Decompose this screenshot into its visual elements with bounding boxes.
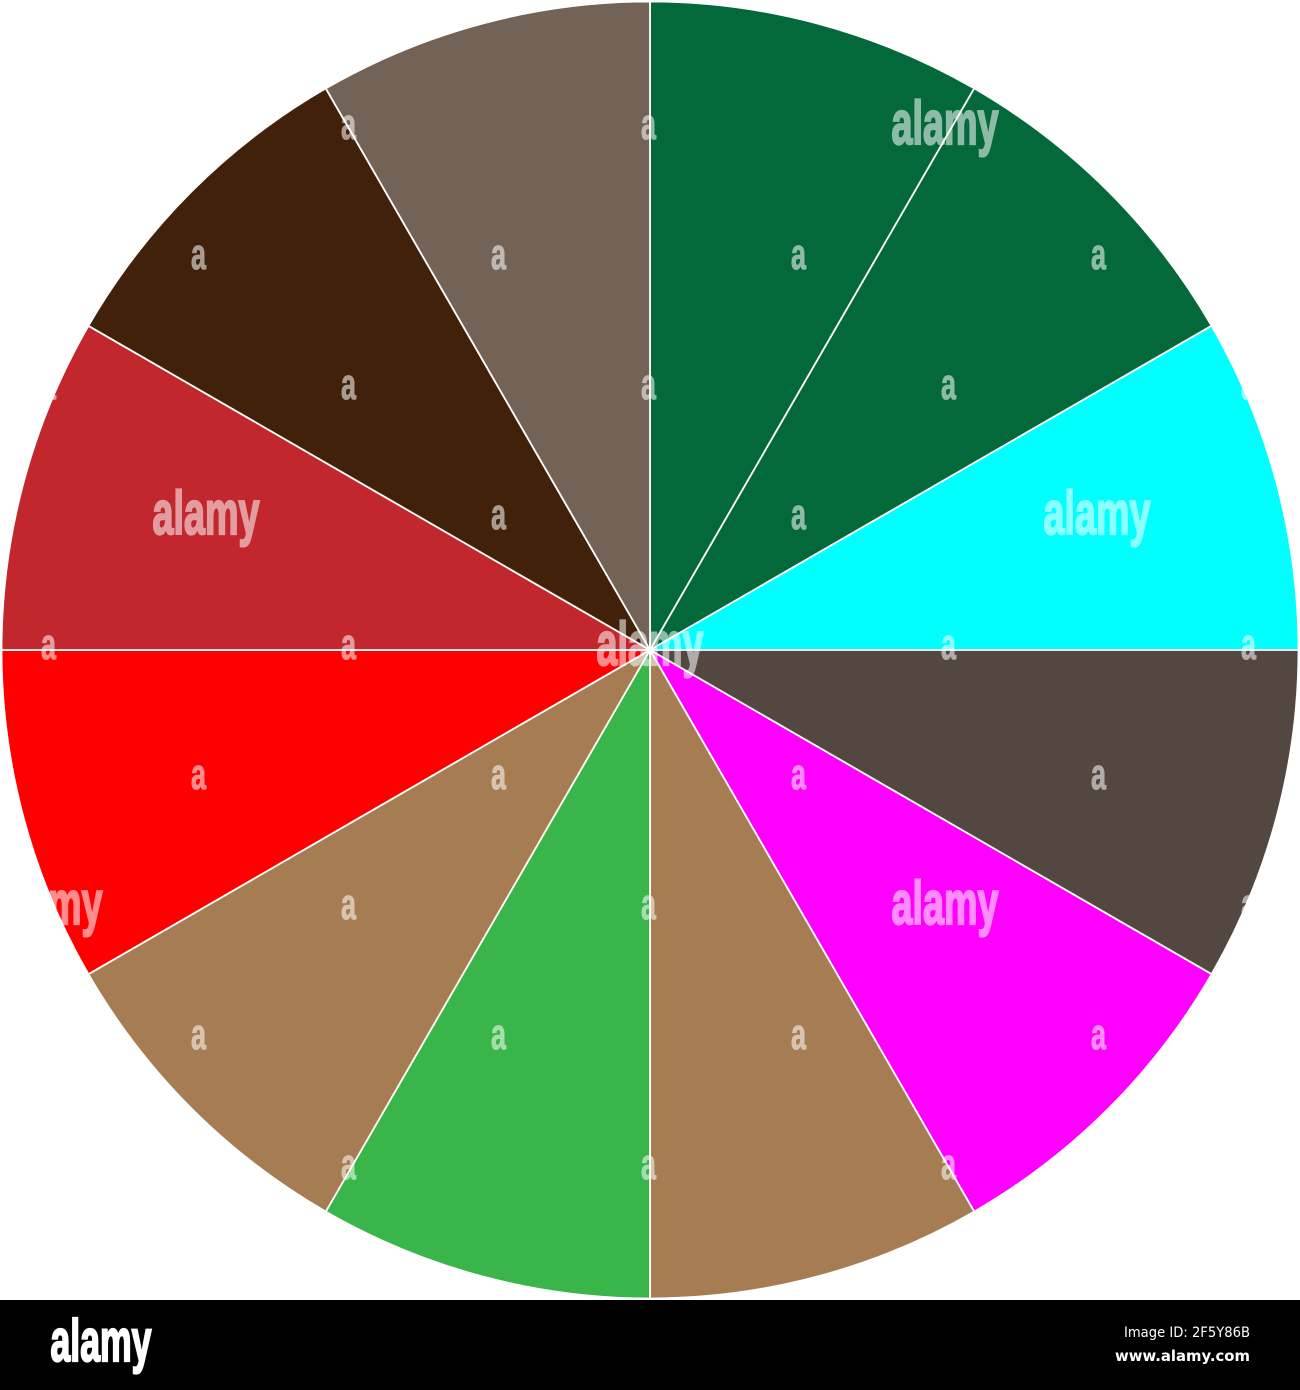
watermark: small repeated a marks: a bbox=[341, 620, 356, 669]
watermark: large alamy marks: alamy bbox=[1044, 479, 1151, 547]
footer logo: alamy: alamy bbox=[50, 1308, 152, 1374]
watermark: small repeated a marks: a bbox=[1241, 360, 1256, 409]
watermark: small repeated a marks: a bbox=[791, 750, 806, 799]
watermark: small repeated a marks: a bbox=[941, 1140, 956, 1189]
watermark: large alamy marks bbox=[0, 89, 1151, 937]
watermark: small repeated a marks: a bbox=[1091, 750, 1106, 799]
segment: red bbox=[2, 650, 650, 974]
watermark: small repeated a marks: a bbox=[1241, 620, 1256, 669]
watermark: small repeated a marks: a bbox=[641, 880, 656, 929]
segment: taupe bbox=[326, 2, 650, 650]
segment: dark green 2 bbox=[650, 88, 1212, 650]
segment: tan left bbox=[88, 650, 650, 1212]
watermark: small repeated a marks: a bbox=[341, 1140, 356, 1189]
watermark: small repeated a marks: a bbox=[341, 100, 356, 149]
watermark: small repeated a marks bbox=[41, 100, 1256, 1189]
watermark: small repeated a marks: a bbox=[1091, 1010, 1106, 1059]
watermark: large alamy marks: alamy bbox=[0, 869, 103, 937]
watermark: small repeated a marks: a bbox=[191, 750, 206, 799]
watermark: small repeated a marks: a bbox=[941, 360, 956, 409]
watermark: large alamy marks: alamy bbox=[892, 869, 999, 937]
footer background bbox=[0, 1300, 1300, 1390]
watermark: small repeated a marks: a bbox=[41, 360, 56, 409]
segment: green bbox=[326, 650, 650, 1298]
watermark: small repeated a marks: a bbox=[641, 100, 656, 149]
watermark: small repeated a marks: a bbox=[491, 490, 506, 539]
footer bar bbox=[0, 1300, 1300, 1390]
watermark: small repeated a marks: a bbox=[341, 880, 356, 929]
watermark: small repeated a marks: a bbox=[641, 360, 656, 409]
segment: dark grey brown bbox=[650, 650, 1298, 974]
watermark: small repeated a marks: a bbox=[191, 1010, 206, 1059]
segment: dark brown bbox=[88, 88, 650, 650]
watermark: small repeated a marks: a bbox=[941, 620, 956, 669]
segment: tan right bbox=[650, 650, 974, 1298]
watermark: small repeated a marks: a bbox=[1241, 880, 1256, 929]
watermark: small repeated a marks: a bbox=[491, 230, 506, 279]
watermark: small repeated a marks: a bbox=[491, 1010, 506, 1059]
watermark: large alamy marks: alamy bbox=[152, 479, 260, 547]
watermark: large alamy marks: alamy bbox=[596, 610, 704, 678]
watermark: small repeated a marks: a bbox=[41, 620, 56, 669]
watermark: small repeated a marks: a bbox=[791, 1010, 806, 1059]
watermark: small repeated a marks: a bbox=[641, 1140, 656, 1189]
watermark: small repeated a marks: a bbox=[1091, 230, 1106, 279]
footer: website: www.alamy.com bbox=[1115, 1347, 1250, 1365]
segment: crimson bbox=[2, 326, 650, 650]
watermark: small repeated a marks: a bbox=[791, 490, 806, 539]
watermark: small repeated a marks: a bbox=[491, 750, 506, 799]
watermark: small repeated a marks: a bbox=[791, 230, 806, 279]
segment: magenta bbox=[650, 650, 1212, 1212]
footer: image id: Image ID: 2F5Y86B bbox=[1124, 1325, 1250, 1341]
watermark: large alamy marks: alamy bbox=[892, 89, 999, 157]
watermark: small repeated a marks: a bbox=[341, 360, 356, 409]
segment: dark green 1 bbox=[650, 2, 974, 650]
watermark: small repeated a marks: a bbox=[191, 230, 206, 279]
segment: cyan bbox=[650, 326, 1298, 650]
